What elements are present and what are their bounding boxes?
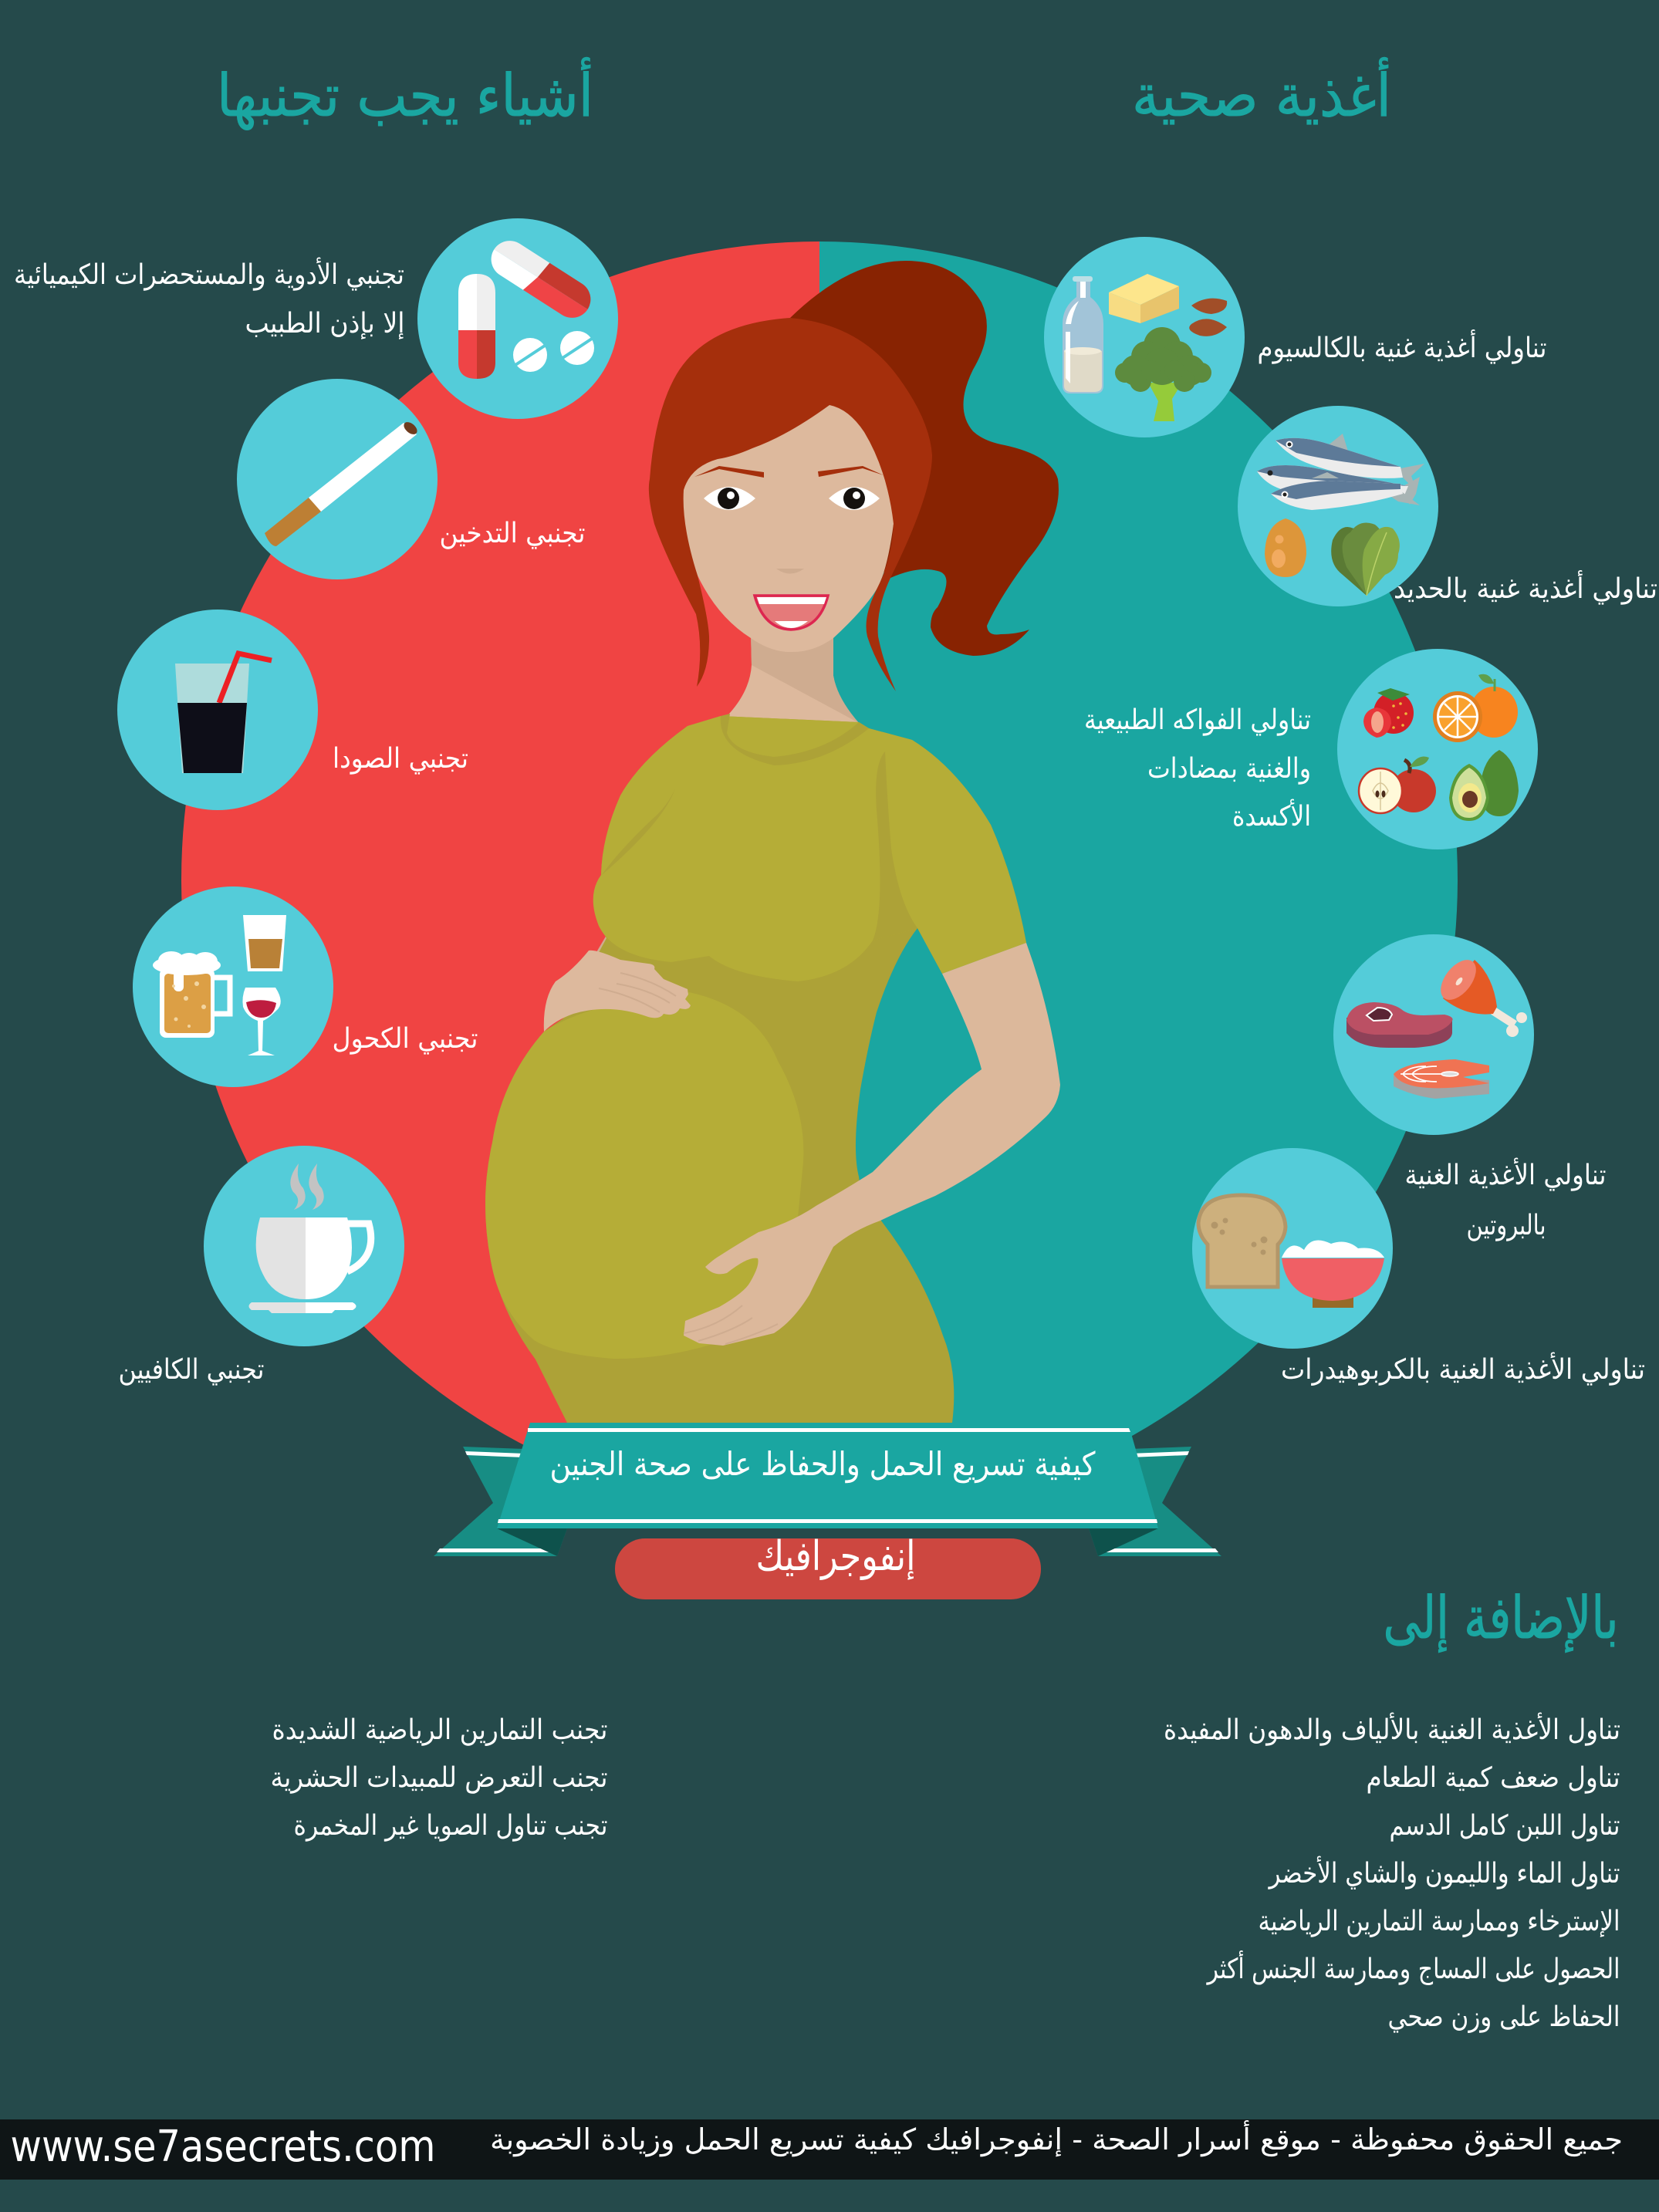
heading: healthy food: أغذية صحية — [1132, 57, 1391, 130]
face — [683, 386, 907, 652]
front hair — [649, 318, 932, 691]
dress skirt and torso — [485, 716, 1026, 1423]
left eye — [704, 487, 755, 510]
chest fold — [602, 789, 675, 875]
left eyebrow — [694, 466, 764, 478]
icon: fruits — [1337, 649, 1538, 849]
nose — [776, 569, 804, 574]
label: medicine: تجنبي الأدوية والمستحضرات الكيميائية — [14, 257, 404, 291]
icon: soda — [117, 610, 318, 810]
label: fruits and antioxidants: تناولي الفواكه الطبيعية — [1084, 704, 1311, 736]
left ribbon tail — [434, 1447, 567, 1556]
label: caffeine: تجنبي الكافيين — [119, 1354, 264, 1386]
right eyebrow — [818, 466, 884, 477]
badge: infographic: إنفوجرافيك — [756, 1533, 915, 1580]
badge: infographic — [615, 1533, 1041, 1599]
left arm and hand — [544, 951, 691, 1032]
list: recommendations — [1164, 1712, 1620, 2033]
label: fruits and antioxidants: والغنية بمضادات — [1147, 753, 1311, 785]
icon: iron foods — [1238, 406, 1438, 606]
label: protein: تناولي الأغذية الغنية — [1404, 1157, 1607, 1191]
dress side shadow — [873, 751, 917, 941]
icon: protein foods — [1333, 934, 1534, 1135]
footer bar — [0, 2119, 1659, 2180]
list: things to avoid: تجنب التمارين الرياضية الشديدة — [272, 1714, 608, 1746]
footer website: www.se7asecrets.com — [11, 2122, 435, 2172]
label: alcohol: تجنبي الكحول — [332, 1023, 478, 1055]
icon: alcohol — [133, 886, 333, 1087]
belly — [485, 992, 803, 1359]
list: recommendations: تناول ضعف كمية الطعام — [1366, 1762, 1620, 1794]
third sardine — [1271, 472, 1420, 510]
label: medicine — [14, 257, 404, 339]
neck — [727, 633, 859, 757]
label: protein: بالبروتين — [1466, 1210, 1546, 1241]
right ribbon tail — [1089, 1447, 1221, 1556]
back hair — [790, 261, 1059, 656]
list: things to avoid: تجنب تناول الصويا غير المخمرة — [293, 1810, 608, 1842]
icon: carbohydrates — [1192, 1148, 1393, 1349]
dress chest and sleeve — [593, 716, 1026, 981]
illustration: pregnant woman — [485, 261, 1060, 1423]
first sardine — [1276, 434, 1424, 491]
underarm shade — [596, 935, 648, 964]
heading: things to avoid: أشياء يجب تجنبها — [217, 57, 593, 130]
right arm and hand — [684, 943, 1060, 1346]
list: recommendations: الحفاظ على وزن صحي — [1387, 2001, 1620, 2033]
icon: cigarette — [237, 379, 438, 579]
footer copyright: جميع الحقوق محفوظة - موقع أسرار الصحة - إنفوجرافيك كيفية تسريع الحمل وزيادة الخصوبة — [490, 2120, 1623, 2157]
icon: coffee — [204, 1146, 404, 1346]
label: medicine: إلا بإذن الطبيب — [245, 308, 404, 339]
icon: pills — [417, 218, 618, 419]
ribbon title: كيفية تسريع الحمل والحفاظ على صحة الجنين — [549, 1445, 1096, 1484]
list: things to avoid: تجنب التعرض للمبيدات الحشرية — [270, 1762, 608, 1794]
ribbon main band — [497, 1423, 1158, 1528]
right eye — [829, 487, 880, 510]
label: protein — [1404, 1157, 1607, 1241]
icon: calcium foods — [1044, 237, 1245, 437]
neck shadow — [751, 633, 859, 723]
label: fruits and antioxidants: الأكسدة — [1232, 799, 1311, 832]
finger creases — [599, 973, 778, 1344]
collar — [721, 714, 869, 765]
list: things to avoid — [270, 1714, 608, 1842]
second sardine — [1257, 465, 1420, 505]
label: soda: تجنبي الصودا — [333, 743, 468, 775]
ribbon banner — [434, 1423, 1221, 1556]
mouth — [755, 596, 828, 630]
label: fruits and antioxidants — [1084, 704, 1311, 832]
list: recommendations: تناول الأغذية الغنية بالألياف والدهون المفيدة — [1164, 1712, 1620, 1746]
label: smoking: تجنبي التدخين — [440, 518, 585, 549]
panel: central two-colour circle — [181, 241, 1458, 1518]
label: calcium: تناولي أغذية غنية بالكالسيوم — [1258, 329, 1546, 364]
list: recommendations: تناول اللبن كامل الدسم — [1389, 1810, 1620, 1842]
